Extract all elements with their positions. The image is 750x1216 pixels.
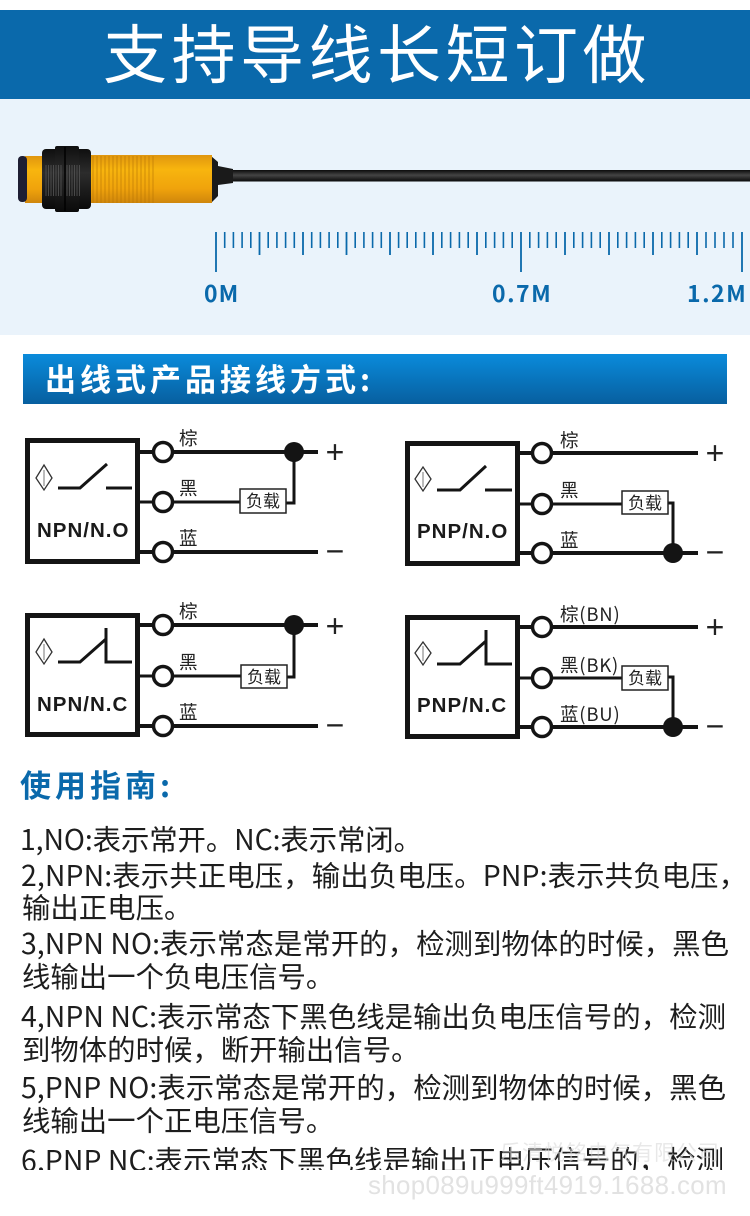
text block: usage notes: 5,PNP NO:表示常态是常开的，检测到物体的时候，黑色	[21, 1066, 726, 1107]
diagram: NPN/N.C: −	[326, 707, 344, 743]
title: 支持导线长短订做	[103, 5, 651, 97]
diagram: NPN/N.C: 棕	[179, 598, 198, 624]
diagram: NPN/N.O: 黑	[179, 475, 198, 501]
watermark	[368, 1137, 727, 1200]
ruler label: 0M: 0M	[204, 275, 239, 309]
diagram: NPN/N.O: −	[326, 533, 344, 569]
icon: cable	[230, 170, 750, 182]
diagram: NPN/N.C	[28, 598, 344, 743]
diagram: PNP/N.O: 蓝	[560, 527, 579, 553]
diagram: PNP/N.O: 棕	[560, 427, 579, 453]
diagram: PNP/N.C	[408, 601, 724, 744]
text block: usage notes: 1,NO:表示常开。NC:表示常闭。	[20, 818, 422, 859]
diagram: PNP/N.C: 黑(BK)	[560, 652, 619, 678]
text block: usage notes	[20, 818, 747, 1180]
diagram: PNP/N.C: 负载	[628, 664, 662, 689]
diagram: NPN/N.O: 棕	[179, 425, 198, 451]
diagram: NPN/N.C: 蓝	[179, 699, 198, 725]
diagram: NPN/N.C: NPN/N.C	[37, 693, 128, 716]
text block: usage notes: 线输出一个负电压信号。	[22, 955, 334, 996]
icon: proximity sensor	[18, 146, 233, 212]
diagram: PNP/N.O: 负载	[628, 489, 662, 514]
diagram: PNP/N.C: −	[706, 708, 724, 744]
ruler	[216, 232, 742, 272]
text block: usage notes: 3,NPN NO:表示常态是常开的，检测到物体的时候，黑色	[21, 922, 729, 963]
watermark: shop089u999ft4919.1688.com	[368, 1172, 727, 1200]
diagram: NPN/N.C: 负载	[247, 663, 281, 688]
text block: usage notes: 6,PNP NC:表示常态下黑色线是输出正电压信号的，检测	[21, 1139, 724, 1180]
heading: usage guide: 使用指南:	[20, 761, 174, 806]
diagram: PNP/N.O: +	[706, 435, 724, 471]
text block: usage notes: 输出正电压。	[22, 886, 192, 927]
section bar: wiring methods	[23, 354, 727, 404]
panel: sensor and cable length	[0, 99, 750, 335]
diagram: PNP/N.O: PNP/N.O	[417, 520, 508, 543]
text block: usage notes: 4,NPN NC:表示常态下黑色线是输出负电压信号的，检测	[21, 995, 726, 1036]
diagram: PNP/N.O	[408, 427, 724, 570]
watermark: 乐清悦铭电气有限公司	[500, 1137, 720, 1167]
ruler label: 1.2M: 1.2M	[687, 275, 747, 309]
text block: usage notes: 线输出一个正电压信号。	[22, 1099, 334, 1140]
diagram: PNP/N.O: 黑	[560, 477, 579, 503]
header banner	[0, 5, 750, 99]
diagram: NPN/N.O: +	[326, 434, 344, 470]
diagram: NPN/N.O: NPN/N.O	[37, 519, 129, 542]
diagram: PNP/N.C: 棕(BN)	[560, 601, 621, 627]
diagram: NPN/N.C: 黑	[179, 649, 198, 675]
diagram: NPN/N.O	[28, 425, 344, 569]
diagram: PNP/N.C: PNP/N.C	[417, 694, 507, 717]
ruler label: 0.7M: 0.7M	[492, 275, 552, 309]
diagram: NPN/N.C: +	[326, 608, 344, 644]
text block: usage notes: 2,NPN:表示共正电压，输出负电压。PNP:表示共负电压，	[21, 854, 747, 895]
diagram: NPN/N.O: 负载	[246, 487, 280, 512]
diagram: PNP/N.C: +	[706, 609, 724, 645]
section heading: 出线式产品接线方式:	[45, 355, 374, 400]
diagram: PNP/N.O: −	[706, 534, 724, 570]
diagram: NPN/N.O: 蓝	[179, 525, 198, 551]
diagram: PNP/N.C: 蓝(BU)	[560, 701, 620, 727]
text block: usage notes: 到物体的时候，断开输出信号。	[22, 1028, 419, 1069]
